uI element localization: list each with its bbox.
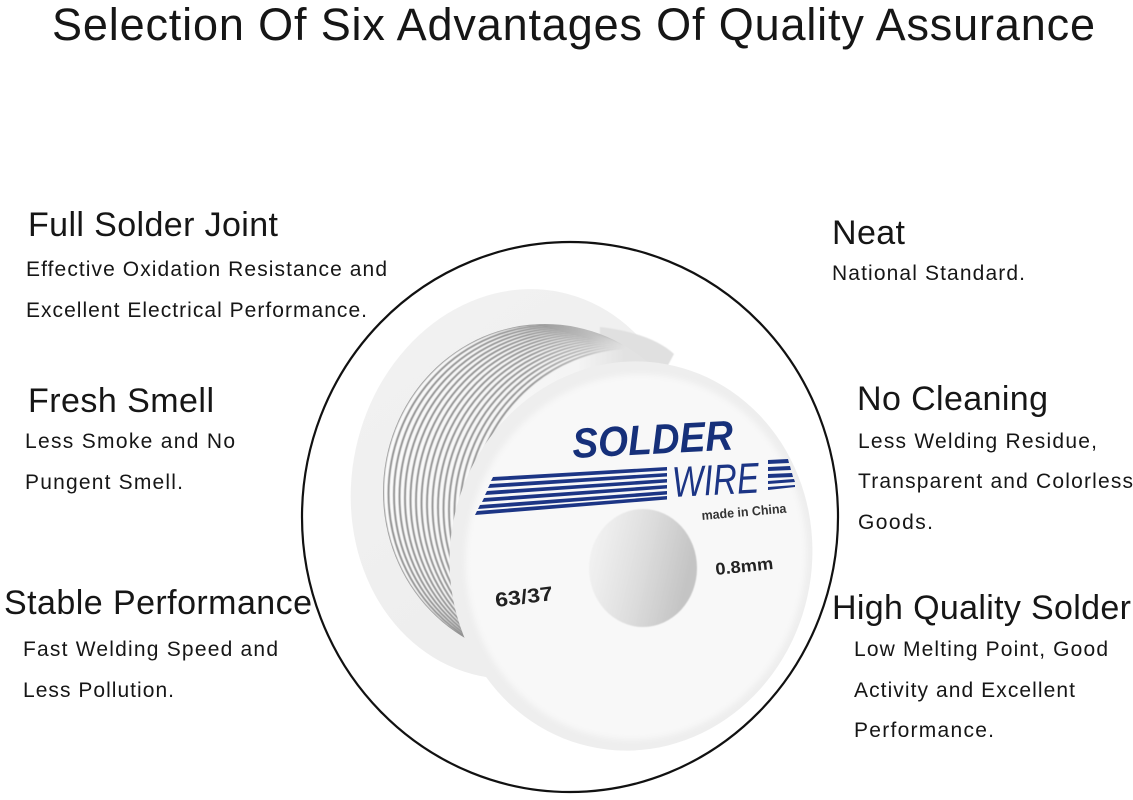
- body text: Effective Oxidation Resistance and: [26, 258, 387, 281]
- inner barrel shadow: [600, 327, 674, 400]
- solder wire spool: [350, 289, 812, 750]
- title: Selection Of Six Advantages Of Quality Assurance: [52, 0, 1095, 50]
- label: blue stripes left: [475, 467, 667, 515]
- spool label: [475, 412, 795, 612]
- body text: [26, 258, 387, 322]
- label: 63/37: 63/37: [494, 583, 554, 612]
- label: 0.8mm: 0.8mm: [714, 554, 774, 579]
- body text: Excellent Electrical Performance.: [26, 299, 367, 322]
- large circle outline: [302, 242, 838, 792]
- body text: [858, 430, 1133, 534]
- body text: Pungent Smell.: [25, 471, 183, 494]
- body text: Transparent and Colorless: [858, 470, 1133, 493]
- heading: Stable Performance: [4, 584, 312, 622]
- block: No Cleaning: [857, 380, 1133, 534]
- block: Stable Performance: [4, 584, 312, 702]
- block: High Quality Solder: [832, 589, 1131, 742]
- spool rear flange: [315, 257, 725, 711]
- spool front flange: [419, 333, 843, 779]
- heading: High Quality Solder: [832, 589, 1131, 627]
- heading: Neat: [832, 214, 906, 252]
- body text: National Standard.: [832, 262, 1025, 285]
- heading: Fresh Smell: [28, 382, 214, 420]
- body text: Performance.: [854, 719, 994, 742]
- body text: [854, 638, 1108, 742]
- block: Neat: [832, 214, 1025, 285]
- body text: Activity and Excellent: [854, 679, 1075, 702]
- block: Full Solder Joint: [26, 206, 387, 322]
- heading: Full Solder Joint: [28, 206, 279, 244]
- label: SOLDER: SOLDER: [571, 412, 735, 467]
- body text: [23, 638, 278, 702]
- label: blue stripes right: [768, 459, 795, 490]
- heading: No Cleaning: [857, 380, 1048, 418]
- body text: Less Pollution.: [23, 679, 174, 702]
- body text: Less Welding Residue,: [858, 430, 1097, 453]
- body text: Less Smoke and No: [25, 430, 235, 453]
- body text: [25, 430, 235, 494]
- block: Fresh Smell: [25, 382, 235, 494]
- spool centre hole: [589, 509, 697, 627]
- body text: Goods.: [858, 511, 933, 534]
- wire coil: [383, 324, 619, 638]
- body text: Fast Welding Speed and: [23, 638, 278, 661]
- body text: Low Melting Point, Good: [854, 638, 1108, 661]
- label: made in China: made in China: [701, 501, 788, 523]
- label: WIRE: WIRE: [671, 454, 761, 507]
